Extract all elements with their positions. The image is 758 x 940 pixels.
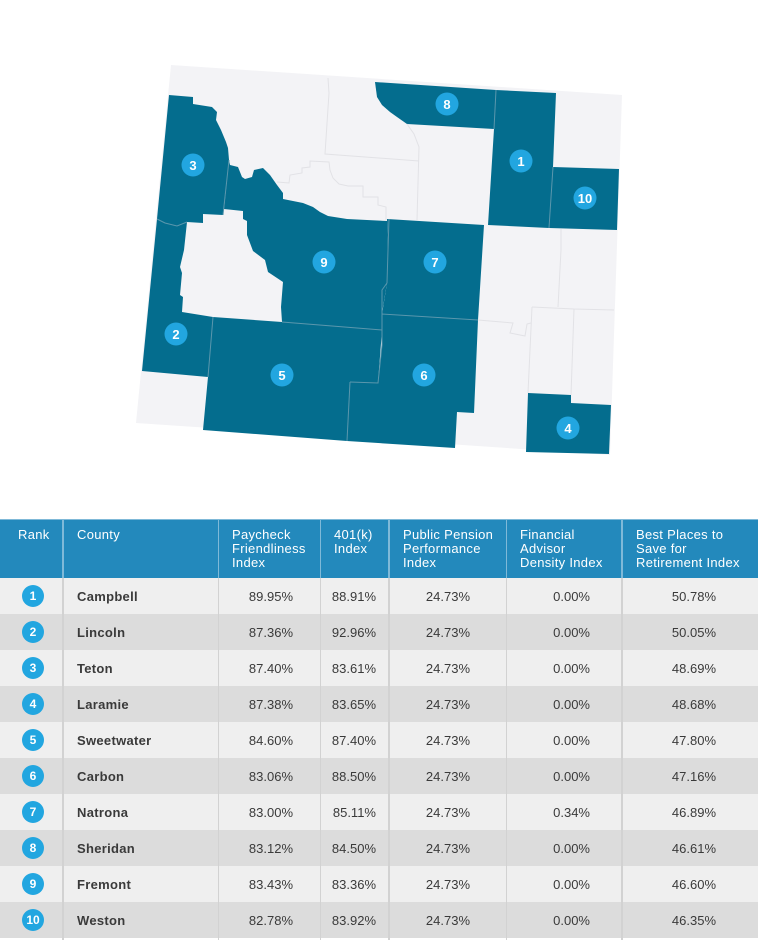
row 1: Campbell: 1 <box>30 589 36 603</box>
marker 9 <box>312 250 336 274</box>
county: Lincoln <box>142 219 213 377</box>
row 9: Fremont: 83.43% <box>249 877 293 892</box>
marker 2: 2 <box>172 327 180 342</box>
row 5: Sweetwater: 87.40% <box>332 733 376 748</box>
marker 5 <box>270 364 294 386</box>
row 5: Sweetwater: 0.00% <box>553 733 590 748</box>
row 6: Carbon: 83.06% <box>249 769 293 784</box>
row 4: Laramie: 4 <box>30 697 36 711</box>
county: Carbon <box>347 314 478 448</box>
marker 1: 1 <box>517 154 525 169</box>
county: Weston <box>549 167 619 230</box>
row 8: Sheridan: 84.50% <box>332 841 376 856</box>
county: Fremont <box>224 160 388 330</box>
row 5: Sweetwater: 47.80% <box>672 733 716 748</box>
row 8: Sheridan: 0.00% <box>553 841 590 856</box>
county: Natrona <box>382 219 484 320</box>
row 9: Fremont: 46.60% <box>672 877 716 892</box>
row 5: Sweetwater: Sweetwater <box>77 733 152 748</box>
county: Sweetwater <box>203 317 382 441</box>
row 10: Weston: Weston <box>77 913 126 928</box>
table header: 401(k) <box>334 527 373 542</box>
row 10: Weston: 46.35% <box>672 913 716 928</box>
row 7: Natrona: Natrona <box>77 805 128 820</box>
row 10: Weston: 0.00% <box>553 913 590 928</box>
row 2: Lincoln: 50.05% <box>672 625 716 640</box>
marker 8: 8 <box>443 97 451 112</box>
county: Laramie <box>526 393 611 454</box>
row 3: Teton: 3 <box>30 661 36 675</box>
row 10: Weston: 82.78% <box>249 913 293 928</box>
row 8: Sheridan: 83.12% <box>249 841 293 856</box>
table header: Financial <box>520 527 575 542</box>
row 1: Campbell: 50.78% <box>672 589 716 604</box>
table header: Save for <box>636 541 687 556</box>
table header: Rank <box>18 527 50 542</box>
row 5: Sweetwater: 5 <box>30 733 36 747</box>
table: county rankings <box>0 519 758 940</box>
state base shape <box>136 65 622 455</box>
table header: Paycheck <box>232 527 291 542</box>
table header <box>0 519 758 578</box>
row 2: Lincoln: Lincoln <box>77 625 125 640</box>
row 9: Fremont: 0.00% <box>553 877 590 892</box>
row 1: Campbell: Campbell <box>77 589 138 604</box>
table header: Density Index <box>520 555 603 570</box>
row 2: Lincoln: 92.96% <box>332 625 376 640</box>
row 7: Natrona: 24.73% <box>426 805 470 820</box>
marker 4: 4 <box>564 421 572 436</box>
row 9: Fremont: 24.73% <box>426 877 470 892</box>
row 9: Fremont <box>0 866 758 902</box>
marker 3: 3 <box>189 158 197 173</box>
county: Campbell <box>488 90 556 228</box>
row 3: Teton: 0.00% <box>553 661 590 676</box>
marker 3 <box>182 154 204 176</box>
row 7: Natrona: 85.11% <box>333 805 376 820</box>
row 2: Lincoln: 0.00% <box>553 625 590 640</box>
map: Wyoming counties <box>136 65 622 455</box>
row 5: Sweetwater: 84.60% <box>249 733 293 748</box>
row 3: Teton: 48.69% <box>672 661 716 676</box>
row 7: Natrona: 46.89% <box>672 805 716 820</box>
marker 5: 5 <box>278 368 286 383</box>
row 3: Teton: 87.40% <box>249 661 293 676</box>
row 2: Lincoln <box>0 614 758 650</box>
marker 7 <box>424 250 446 274</box>
row 6: Carbon <box>0 758 758 794</box>
marker 1 <box>510 150 532 172</box>
row 3: Teton: 83.61% <box>332 661 376 676</box>
row 10: Weston <box>0 902 758 938</box>
row 4: Laramie: 24.73% <box>426 697 470 712</box>
row 4: Laramie: 0.00% <box>553 697 590 712</box>
table header: Index <box>334 541 367 556</box>
row 8: Sheridan <box>0 830 758 866</box>
row 3: Teton: Teton <box>77 661 113 676</box>
row 10: Weston: 10 <box>26 913 40 927</box>
table header: Index <box>403 555 436 570</box>
row 8: Sheridan: Sheridan <box>77 841 135 856</box>
row 9: Fremont: Fremont <box>77 877 131 892</box>
row 7: Natrona: 7 <box>30 805 36 819</box>
county: Sheridan <box>375 82 496 129</box>
table header: County <box>77 527 120 542</box>
row 3: Teton: 24.73% <box>426 661 470 676</box>
row 9: Fremont: 83.36% <box>332 877 376 892</box>
row 4: Laramie: 48.68% <box>672 697 716 712</box>
row 6: Carbon: 47.16% <box>672 769 716 784</box>
row 6: Carbon: 0.00% <box>553 769 590 784</box>
marker 8 <box>436 92 458 116</box>
table header: Performance <box>403 541 481 556</box>
row 6: Carbon: 24.73% <box>426 769 470 784</box>
row 4: Laramie: 83.65% <box>332 697 376 712</box>
row 1: Campbell: 89.95% <box>249 589 293 604</box>
row 8: Sheridan: 24.73% <box>426 841 470 856</box>
row 4: Laramie: Laramie <box>77 697 129 712</box>
county: Teton <box>157 95 229 226</box>
marker 10: 10 <box>578 191 592 206</box>
marker 6: 6 <box>420 368 428 383</box>
row 2: Lincoln: 24.73% <box>426 625 470 640</box>
table header: Index <box>232 555 265 570</box>
table header: Advisor <box>520 541 565 556</box>
row 5: Sweetwater <box>0 722 758 758</box>
row 6: Carbon: Carbon <box>77 769 124 784</box>
row 5: Sweetwater: 24.73% <box>426 733 470 748</box>
row 6: Carbon: 88.50% <box>332 769 376 784</box>
table header: Best Places to <box>636 527 723 542</box>
row 8: Sheridan: 8 <box>30 841 36 855</box>
marker 9: 9 <box>320 255 328 270</box>
row 8: Sheridan: 46.61% <box>672 841 716 856</box>
row 7: Natrona: 0.34% <box>553 805 590 820</box>
table header: Retirement Index <box>636 555 740 570</box>
row 1: Campbell: 0.00% <box>553 589 590 604</box>
row 10: Weston: 24.73% <box>426 913 470 928</box>
row 4: Laramie: 87.38% <box>249 697 293 712</box>
row 3: Teton <box>0 650 758 686</box>
row 7: Natrona <box>0 794 758 830</box>
marker 2 <box>164 322 188 346</box>
row 9: Fremont: 9 <box>30 877 36 891</box>
row 1: Campbell <box>0 578 758 614</box>
row 6: Carbon: 6 <box>30 769 36 783</box>
row 2: Lincoln: 87.36% <box>249 625 293 640</box>
row 10: Weston: 83.92% <box>332 913 376 928</box>
marker 4 <box>556 416 580 440</box>
table header: Friendliness <box>232 541 306 556</box>
row 2: Lincoln: 2 <box>30 625 36 639</box>
marker 10 <box>574 186 596 210</box>
marker 6 <box>412 364 436 386</box>
row 4: Laramie <box>0 686 758 722</box>
row 1: Campbell: 24.73% <box>426 589 470 604</box>
row 7: Natrona: 83.00% <box>249 805 293 820</box>
row 1: Campbell: 88.91% <box>332 589 376 604</box>
marker 7: 7 <box>431 255 439 270</box>
table header: Public Pension <box>403 527 493 542</box>
